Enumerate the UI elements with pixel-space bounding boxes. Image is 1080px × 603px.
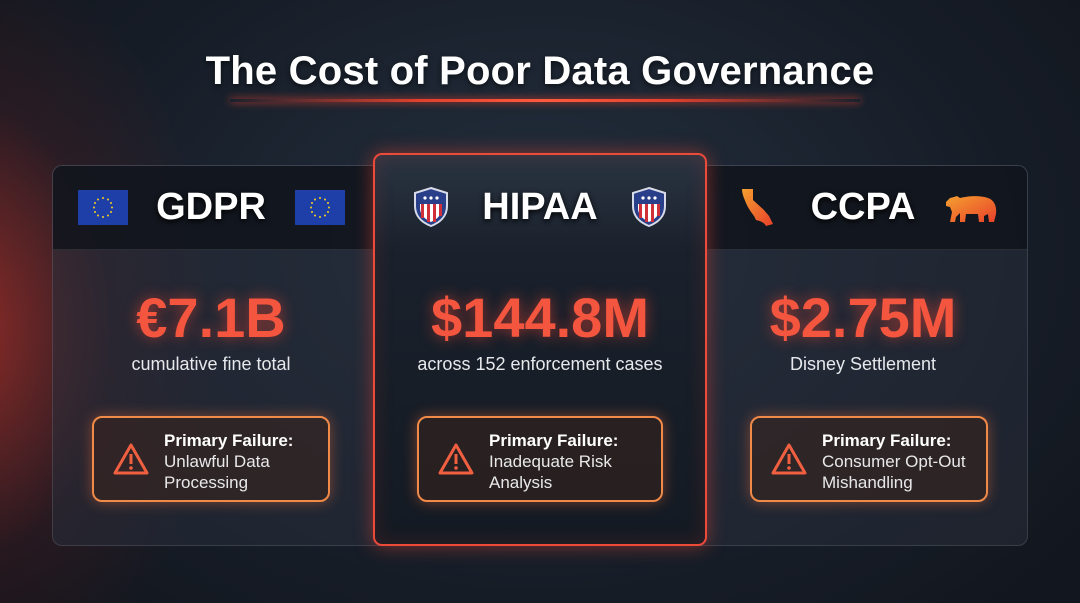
callout: HIPAA failure: Inadequate Risk (489, 452, 612, 471)
icon: California (742, 189, 773, 226)
caption: CCPA: Disney Settlement (790, 354, 936, 374)
callout: CCPA failure: Consumer Opt-Out (822, 452, 966, 471)
heading: CCPA: CCPA (811, 186, 915, 228)
callout: CCPA failure: Mishandling (822, 473, 913, 492)
stat: CCPA: $2.75M (770, 286, 956, 349)
title: The Cost of Poor Data Governance (206, 49, 874, 93)
stat: GDPR: €7.1B (136, 286, 286, 349)
callout: HIPAA failure: Analysis (489, 473, 552, 492)
icon: shield right (632, 187, 666, 228)
panel: outer container (52, 165, 1028, 546)
heading: GDPR: GDPR (156, 186, 266, 228)
heading: HIPAA: HIPAA (482, 186, 598, 228)
icon: bear (946, 196, 996, 222)
stat: HIPAA: $144.8M (431, 286, 649, 349)
icon: shield left (414, 187, 448, 228)
callout: GDPR failure (92, 416, 330, 502)
callout: GDPR failure: Unlawful Data (164, 452, 270, 471)
callout: HIPAA failure (417, 416, 663, 502)
caption: GDPR: cumulative fine total (131, 354, 291, 374)
caption: HIPAA: across 152 enforcement cases (417, 354, 663, 374)
panel: HIPAA highlight card (373, 153, 707, 546)
callout: GDPR failure: Processing (164, 473, 248, 492)
callout: HIPAA failure: Primary Failure: (489, 431, 618, 450)
icon: EU flag left (78, 190, 128, 225)
callout: CCPA failure (750, 416, 988, 502)
title underline (230, 99, 860, 102)
icon: EU flag right (295, 190, 345, 225)
callout: CCPA failure: Primary Failure: (822, 431, 951, 450)
callout: GDPR failure: Primary Failure: (164, 431, 293, 450)
